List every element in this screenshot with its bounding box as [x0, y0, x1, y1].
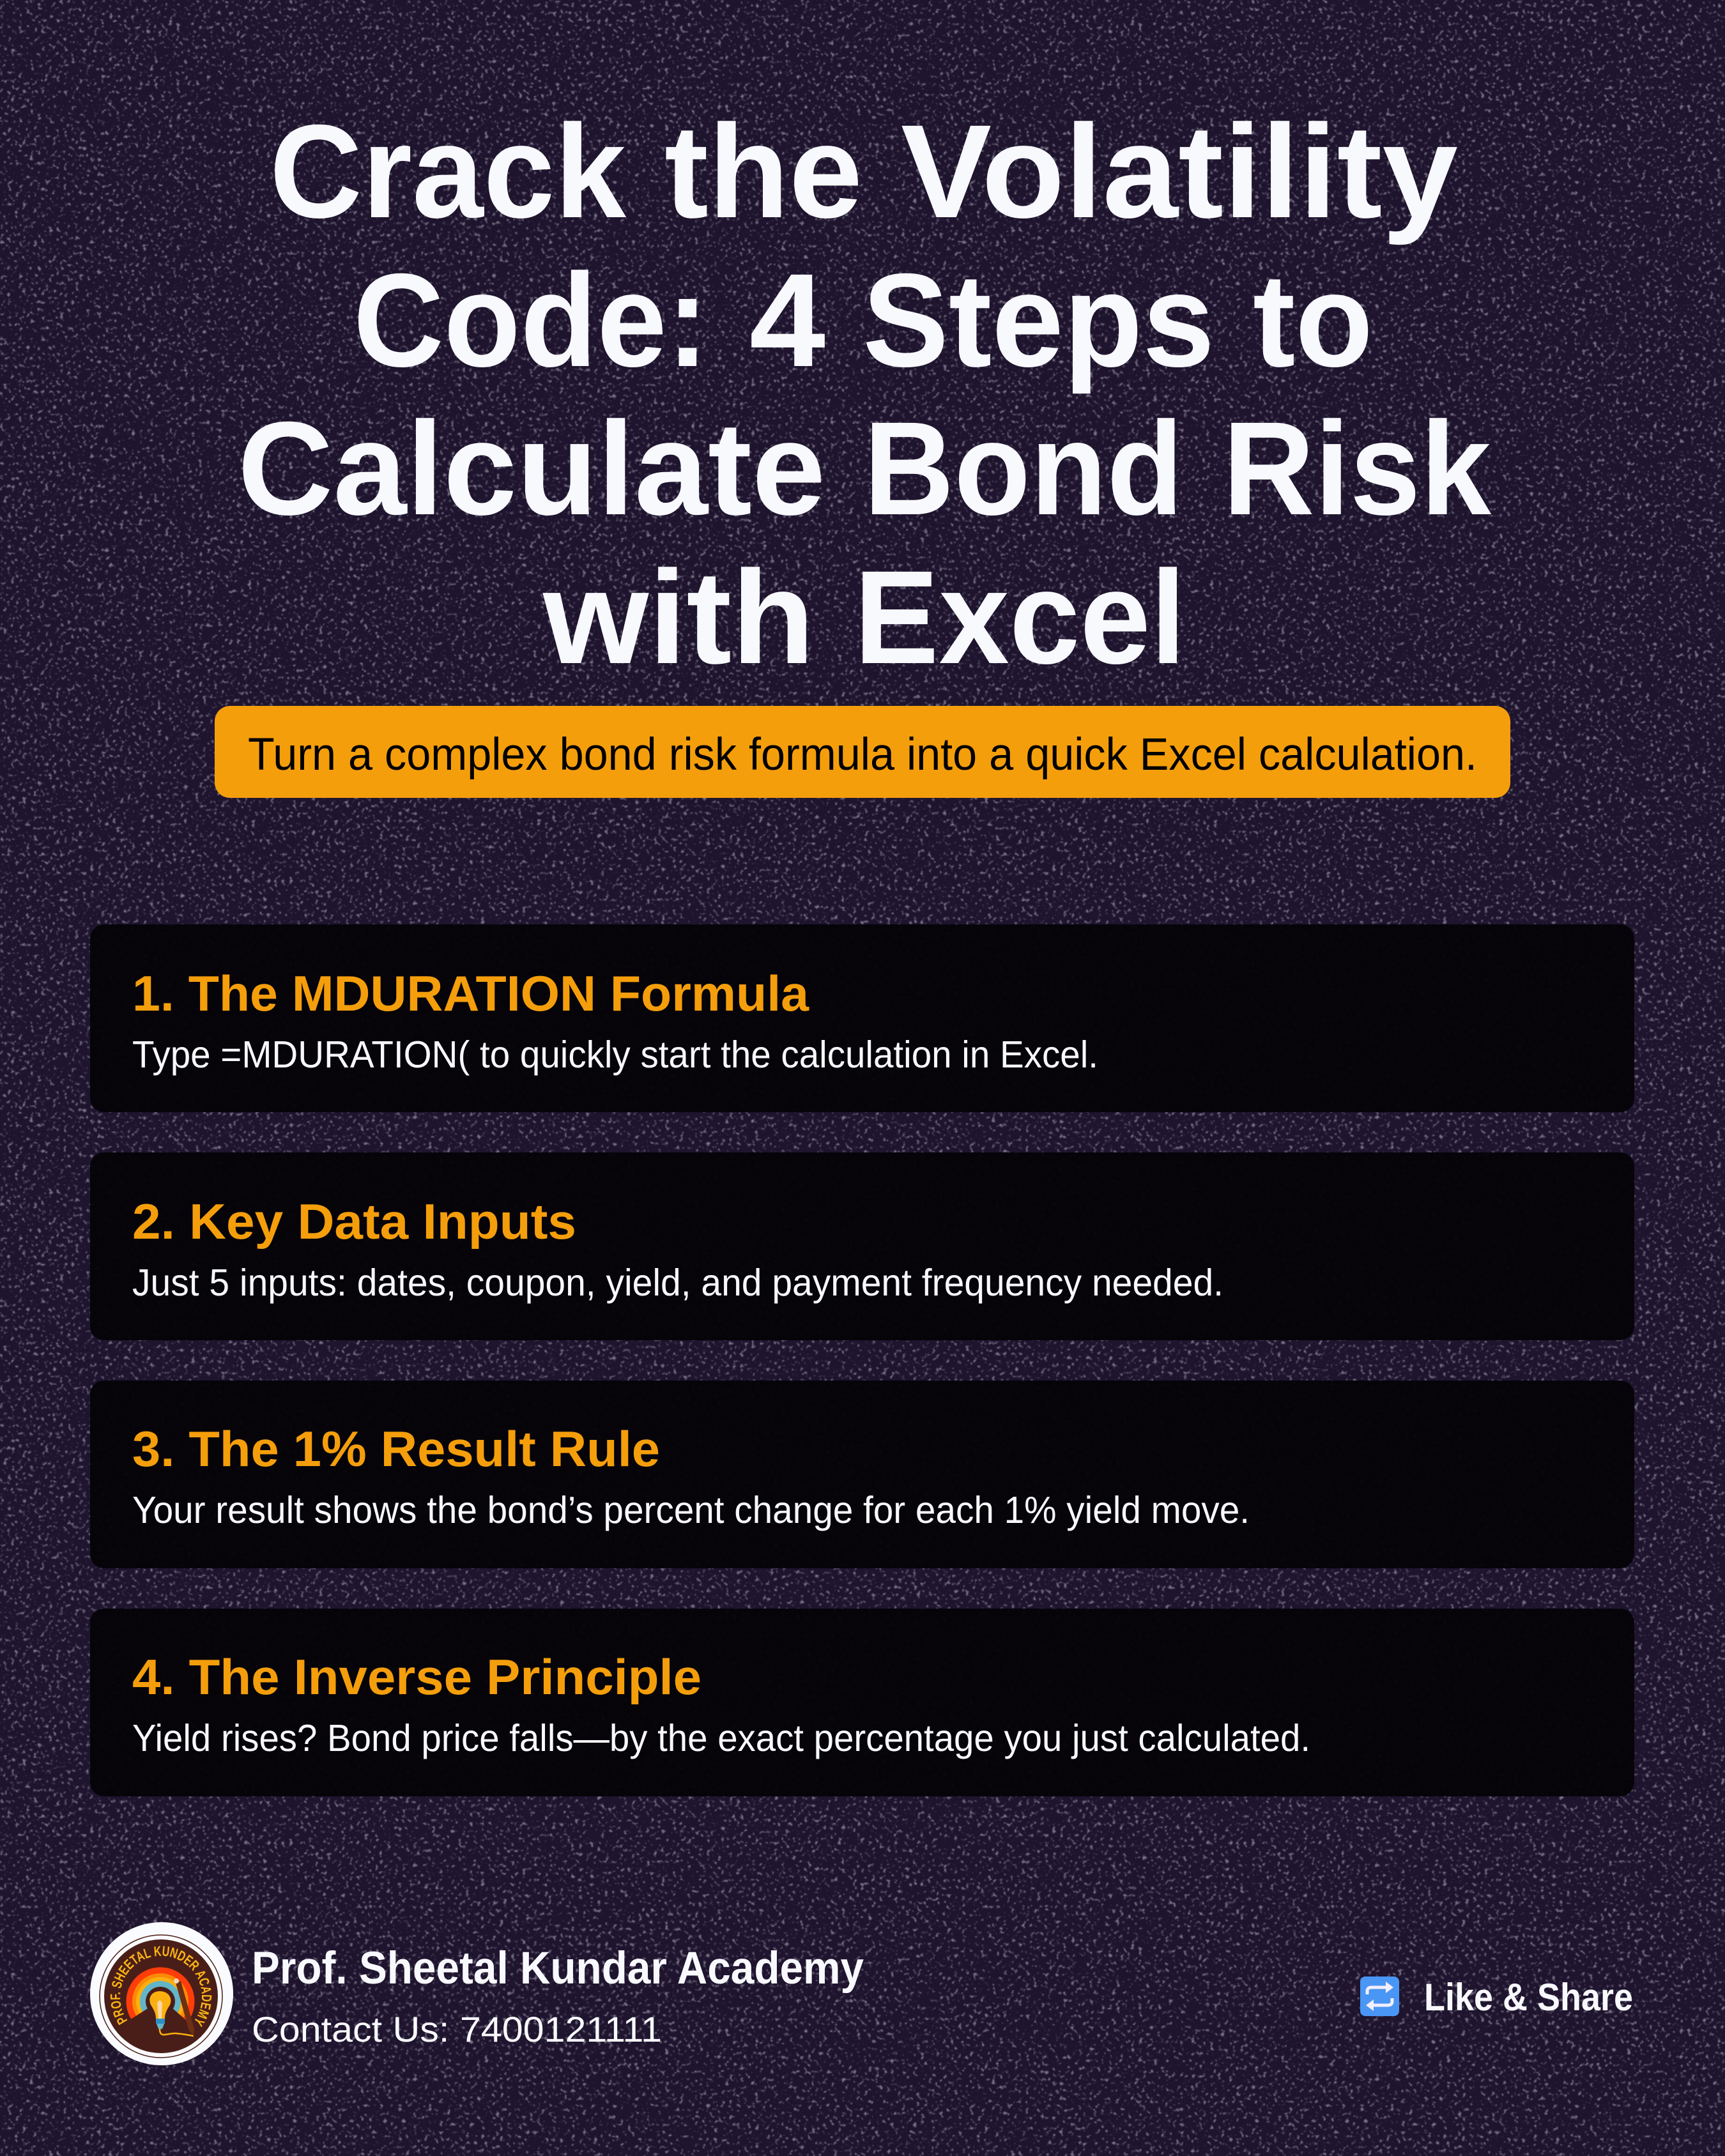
title: with — [542, 544, 815, 692]
title: Calculate — [238, 395, 825, 543]
icon: academy logo: PROF. SHEETAL KUNDER ACADEMY — [110, 1946, 212, 2028]
step 3 heading: 3. The 1% Result Rule — [132, 1421, 660, 1477]
title — [238, 98, 1491, 692]
subtitle pill: Turn a complex bond risk formula into a quick Excel calculation. — [248, 730, 1477, 780]
title: to — [1253, 247, 1373, 395]
step 2 description: Just 5 inputs: dates, coupon, yield, and payment frequency needed. — [132, 1262, 1223, 1304]
title: the — [664, 98, 862, 246]
title: Volatility — [901, 98, 1458, 246]
panel: step 4 — [90, 1609, 1634, 1796]
step 1 description: Type =MDURATION( to quickly start the calculation in Excel. — [132, 1034, 1098, 1076]
panel: step 2 — [90, 1152, 1634, 1340]
title: Code: — [353, 247, 709, 395]
panel: step 3 — [90, 1380, 1634, 1568]
academy name: Prof. Sheetal Kundar Academy — [252, 1943, 864, 1994]
subtitle pill — [215, 706, 1510, 798]
title: Bond — [864, 395, 1183, 543]
icon: academy logo — [90, 1922, 233, 2065]
step 1 heading: 1. The MDURATION Formula — [132, 965, 809, 1021]
panel: step 1 — [90, 924, 1634, 1112]
step 2 heading: 2. Key Data Inputs — [132, 1193, 576, 1250]
title: Crack — [270, 98, 626, 246]
title: Excel — [854, 544, 1186, 692]
title: Steps — [862, 247, 1215, 395]
icon: repeat share — [1360, 1976, 1399, 2016]
title: Risk — [1223, 395, 1491, 543]
like and share label: Like & Share — [1424, 1976, 1633, 2019]
step 4 description: Yield rises? Bond price falls—by the exact percentage you just calculated. — [132, 1717, 1310, 1759]
title: 4 — [749, 247, 825, 395]
contact line: Contact Us: 7400121111 — [252, 2009, 662, 2049]
step 3 description: Your result shows the bond’s percent change for each 1% yield move. — [132, 1489, 1250, 1531]
step 4 heading: 4. The Inverse Principle — [132, 1649, 702, 1705]
